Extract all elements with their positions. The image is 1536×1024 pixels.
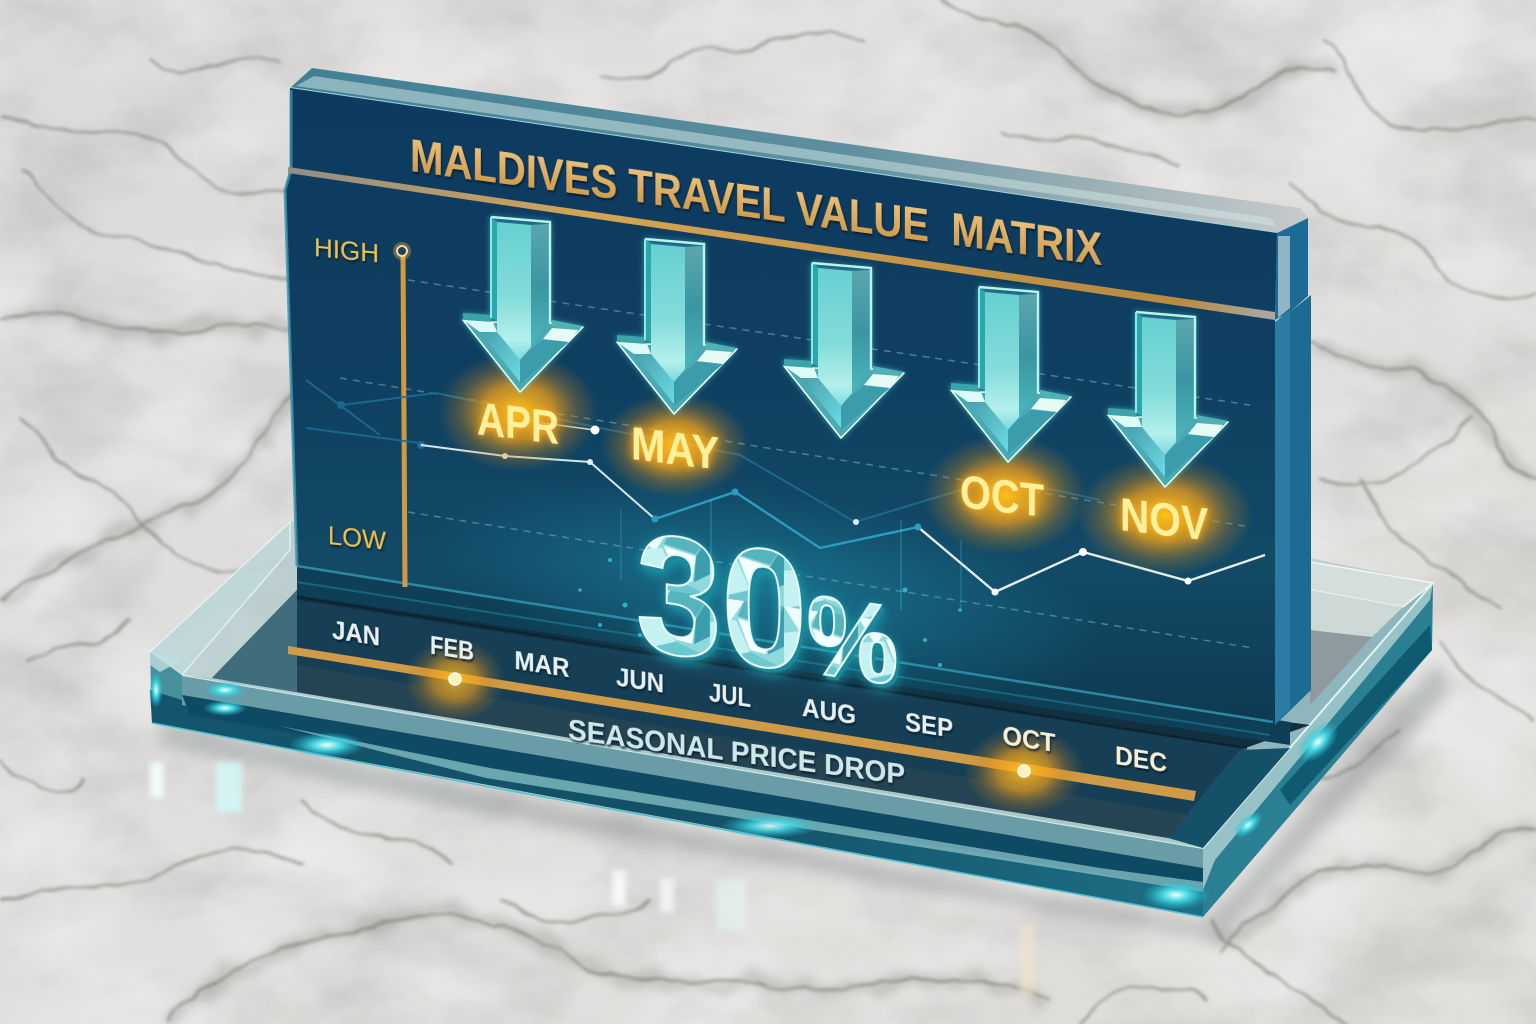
arrow: April <box>463 217 583 392</box>
particles around the discount figure <box>578 500 962 682</box>
panel top bevel <box>290 68 1308 233</box>
highlight label: NOV: NOV <box>1120 488 1208 551</box>
month label: JAN: JAN <box>332 614 380 652</box>
arrow: May <box>617 239 737 414</box>
month label: OCT: OCT <box>1002 720 1056 758</box>
value line chart <box>421 420 1265 596</box>
vertical gold axis <box>393 242 411 587</box>
highlight label: MAY: MAY <box>631 417 719 480</box>
gold timeline bar <box>288 646 1196 801</box>
month label: FEB: FEB <box>430 630 474 666</box>
month label: JUN: JUN <box>616 661 664 699</box>
base right edge <box>1203 583 1433 917</box>
timeline glow: February <box>405 638 505 722</box>
timeline marker: October <box>1018 765 1030 777</box>
axis label: low: LOW <box>328 520 386 556</box>
dark trend lines <box>306 380 1100 522</box>
month label: MAR: MAR <box>514 645 570 683</box>
highlight label: APR: APR <box>477 392 559 454</box>
arrow: November <box>1108 312 1228 487</box>
title: MALDIVES TRAVEL VALUE MATRIX <box>410 129 1102 275</box>
dark glass floor <box>212 590 1310 838</box>
month label: JUL: JUL <box>709 677 751 713</box>
panel front face <box>285 88 1277 725</box>
timeline glow: October <box>964 727 1084 815</box>
month label: SEP: SEP <box>905 706 953 744</box>
gold glows behind highlighted months <box>438 352 1253 575</box>
big discount figure: 30%: 30% <box>636 496 898 721</box>
base timeline <box>288 614 1196 815</box>
highlight label: OCT: OCT <box>960 465 1044 527</box>
base front edge left face <box>150 652 182 723</box>
caption: seasonal price drop: SEASONAL PRICE DROP <box>568 714 905 791</box>
panel lower right side <box>1275 295 1311 725</box>
base shadow and reflections on the marble <box>150 660 1450 995</box>
panel upper right side <box>1275 218 1308 320</box>
arrow: October <box>951 287 1071 462</box>
glass base plate <box>149 522 1433 917</box>
upright glass display panel <box>285 68 1311 742</box>
cyan edge lights <box>203 681 247 699</box>
month label: DEC: DEC <box>1115 740 1167 778</box>
base left rim <box>150 522 290 675</box>
dashed grid lines <box>340 280 1253 648</box>
base top surface <box>150 522 1433 848</box>
gold separator line <box>288 167 1275 320</box>
base right rim <box>1168 578 1433 848</box>
month label: AUG: AUG <box>802 692 856 730</box>
timeline marker: February <box>449 673 461 685</box>
axis label: high: HIGH <box>314 232 379 268</box>
base front edge <box>150 675 1203 917</box>
arrow: June to September <box>784 263 904 438</box>
